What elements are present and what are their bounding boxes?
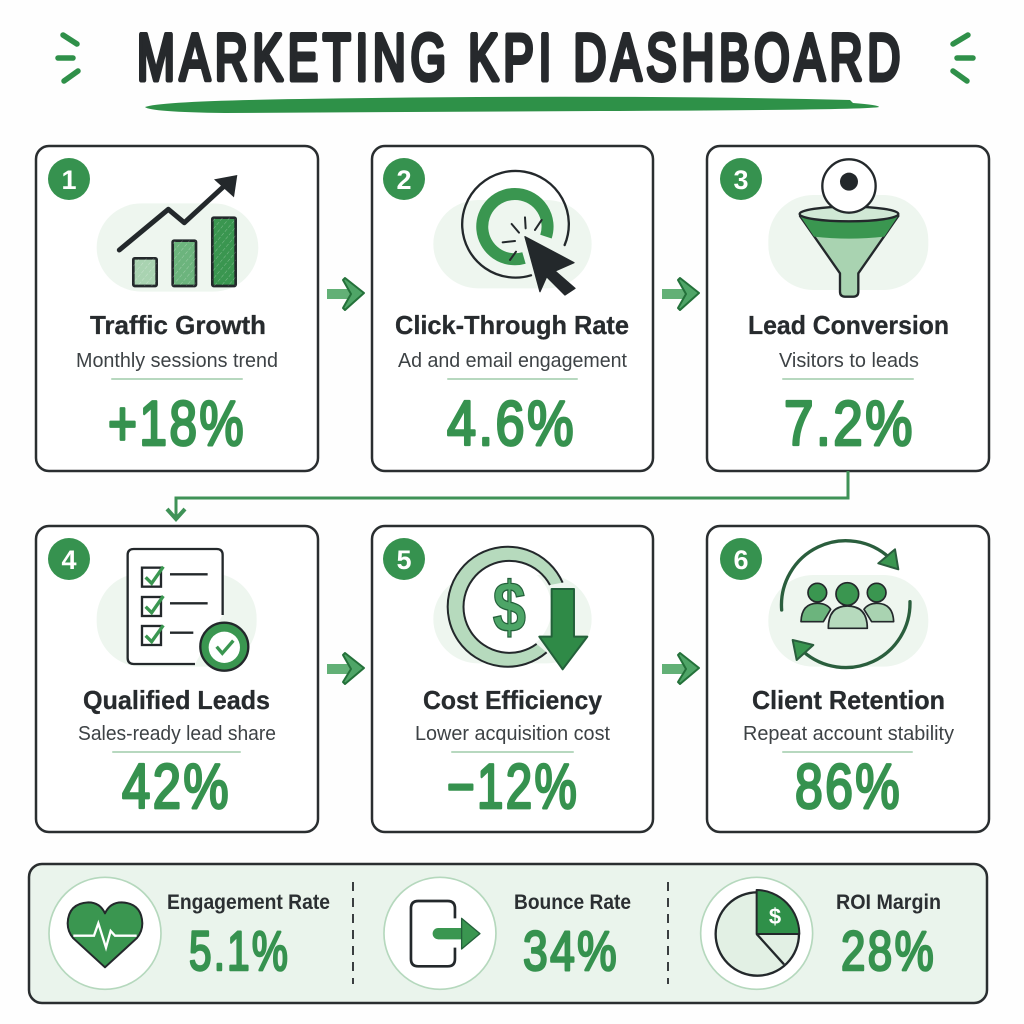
value: 4.6% (447, 389, 576, 459)
badge 3: 3 (733, 165, 749, 195)
icon: dollar with down arrow (433, 547, 592, 669)
icon: growth chart (97, 175, 258, 292)
badge 5 (383, 538, 425, 580)
value: −12% (447, 752, 579, 822)
left title accent dashes (58, 35, 78, 81)
description: Visitors to leads (779, 350, 919, 372)
arrow: 5 to 6 (662, 653, 699, 684)
heading: Qualified Leads (83, 685, 270, 715)
value: +18% (108, 389, 246, 459)
icon: ROI pie chart: $ (769, 904, 781, 929)
description: Ad and email engagement (398, 350, 627, 372)
badge 4 (48, 538, 90, 580)
metric: engagement rate (167, 891, 330, 982)
panel: qualified leads (36, 526, 318, 832)
badge 6: 6 (733, 545, 749, 575)
description: Repeat account stability (743, 723, 954, 745)
icon: heart with pulse (49, 877, 161, 989)
icon: ROI pie chart (701, 877, 813, 989)
badge 2 (383, 158, 425, 200)
heading: Traffic Growth (90, 310, 266, 340)
badge 1 (48, 158, 90, 200)
value: 42% (122, 752, 231, 822)
arrow: row connector from 3 to 4 (167, 471, 848, 519)
description: Sales-ready lead share (78, 723, 276, 745)
panel: cost efficiency (372, 526, 653, 832)
metric: bounce rate (514, 891, 631, 982)
arrow: 4 to 5 (327, 653, 364, 684)
badge 3 (720, 158, 762, 200)
icon: exit door with arrow (384, 877, 496, 989)
description: Monthly sessions trend (76, 350, 278, 372)
metric: engagement rate: 5.1% (189, 919, 290, 982)
panel: click-through rate (372, 146, 653, 471)
heading: Cost Efficiency (423, 685, 603, 715)
metric: bounce rate: 34% (523, 919, 619, 982)
icon: funnel with eye (768, 159, 928, 297)
badge 2: 2 (396, 165, 412, 195)
heading: Client Retention (752, 685, 945, 715)
metric: engagement rate: Engagement Rate (167, 891, 330, 914)
description: Lower acquisition cost (415, 723, 610, 745)
heading: Click-Through Rate (395, 310, 629, 340)
panel: lead conversion (707, 146, 989, 471)
icon: click target (433, 171, 592, 295)
metric: ROI margin: ROI Margin (836, 891, 941, 914)
icon: people in retention cycle (768, 541, 928, 668)
badge 5: 5 (396, 545, 412, 575)
icon: dollar with down arrow: $ (493, 568, 526, 648)
value: 7.2% (784, 389, 915, 459)
value: 86% (795, 752, 902, 822)
badge 4: 4 (61, 545, 77, 575)
heading: Lead Conversion (748, 310, 949, 340)
title underline brush stroke (145, 97, 879, 113)
panel: client retention (707, 526, 989, 832)
panel: bottom metrics strip (29, 864, 987, 1003)
right title accent dashes (953, 35, 973, 81)
badge 6 (720, 538, 762, 580)
metric: ROI margin (836, 891, 941, 982)
icon: checklist (97, 549, 257, 671)
panel: traffic growth (36, 146, 318, 471)
metric: ROI margin: 28% (841, 919, 936, 982)
arrow: 1 to 2 (327, 278, 364, 310)
metric: bounce rate: Bounce Rate (514, 891, 631, 914)
arrow: 2 to 3 (662, 278, 699, 310)
badge 1: 1 (61, 165, 77, 195)
